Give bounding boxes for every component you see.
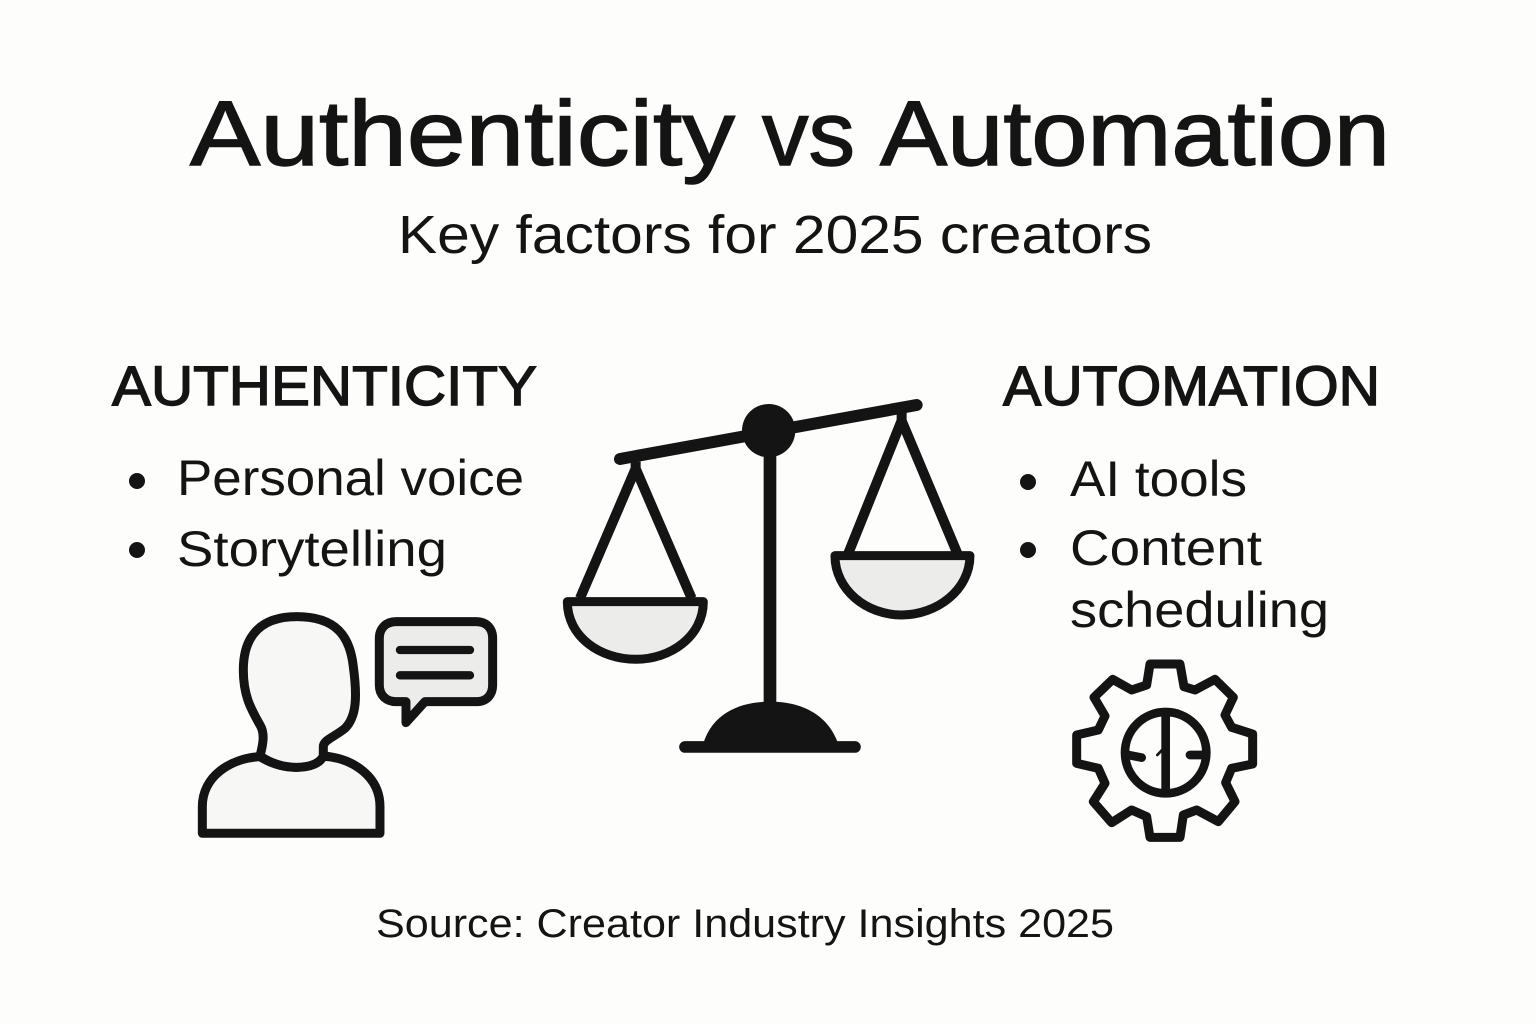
automation bullet list: AI tools — [1070, 451, 1247, 507]
scale post — [751, 453, 789, 707]
icon: speech bubble — [379, 622, 493, 723]
heading: automation: AUTOMATION — [1003, 354, 1380, 417]
title: Automation — [880, 83, 1390, 185]
left pan — [567, 462, 703, 659]
icon: balance scale — [567, 404, 970, 747]
authenticity bullet list — [129, 450, 524, 577]
title: vs — [762, 83, 855, 185]
scale base — [703, 702, 838, 743]
authenticity bullet list: Storytelling — [177, 521, 447, 577]
automation bullet list: Content — [1070, 520, 1262, 576]
title — [190, 83, 1390, 185]
icon: gear — [1077, 664, 1253, 837]
panel: authenticity — [112, 354, 537, 833]
scale beam — [620, 405, 917, 459]
automation bullet list — [1020, 451, 1329, 638]
title: Authenticity — [190, 83, 735, 185]
heading: authenticity: AUTHENTICITY — [112, 354, 537, 417]
panel: automation — [1003, 354, 1380, 837]
subtitle: Key factors for 2025 creators — [398, 205, 1152, 265]
source note: Source: Creator Industry Insights 2025 — [376, 902, 1114, 946]
icon: person — [202, 617, 380, 833]
authenticity bullet list: Personal voice — [177, 450, 524, 506]
automation bullet list: scheduling — [1070, 582, 1329, 638]
right pan — [835, 410, 970, 615]
